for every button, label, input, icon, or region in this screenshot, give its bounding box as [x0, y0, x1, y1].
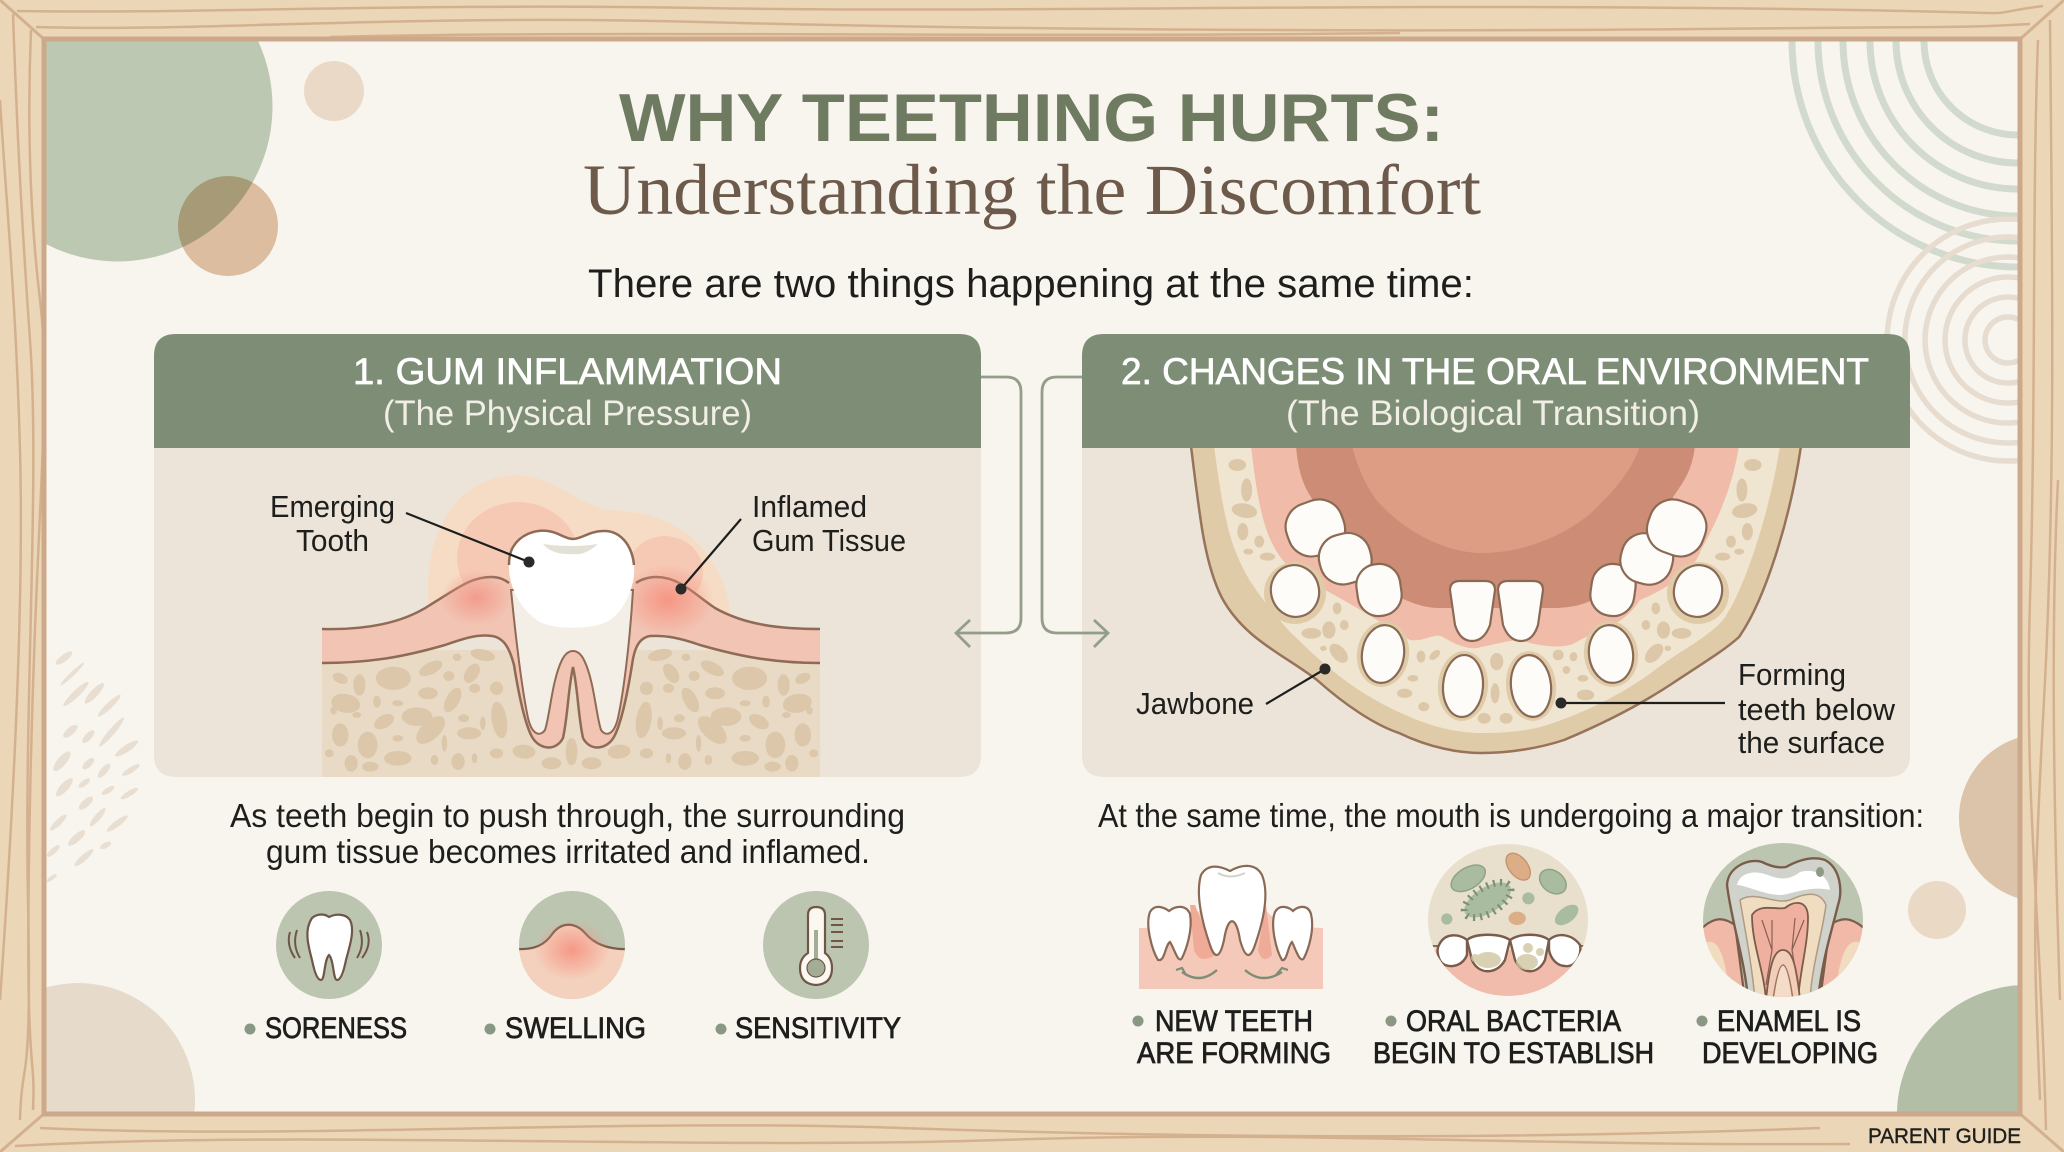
tooth crown: [509, 531, 634, 628]
label: inflamed gum tissue: Inflamed: [752, 489, 867, 524]
mouth floor: [1296, 446, 1695, 608]
title line 2: Understanding the Discomfort: [583, 150, 1481, 230]
inflammation glow: [428, 475, 729, 625]
teeth erupted: [1265, 493, 1728, 641]
label: new teeth: NEW TEETH: [1155, 1005, 1313, 1038]
icon: swelling: [519, 891, 625, 999]
panel background: [1082, 448, 1910, 777]
text block: gum description: gum tissue becomes irritated and inflamed.: [266, 833, 870, 870]
label: emerging tooth: Tooth: [296, 523, 369, 558]
illustration: emerging tooth in gum: [270, 475, 906, 777]
label: emerging tooth: [270, 489, 534, 568]
panel background: [154, 448, 981, 777]
icon: enamel developing: [1703, 843, 1863, 997]
icon: soreness: [276, 891, 382, 999]
bone: [322, 650, 820, 777]
gum: [322, 577, 820, 747]
label: soreness: SORENESS: [265, 1012, 407, 1045]
subtitle: There are two things happening at the same time:: [588, 262, 1474, 306]
footer label: parent guide: PARENT GUIDE: [1868, 1125, 2021, 1148]
bone spots: [1227, 459, 1762, 724]
text block: transition description: At the same time, the mouth is undergoing a major transition:: [1098, 797, 1924, 834]
label: forming teeth: Forming: [1738, 657, 1846, 692]
illustration: lower jaw: [1136, 446, 1896, 760]
tooth sockets: [1264, 562, 1729, 723]
label: new teeth: [1132, 1005, 1331, 1070]
tooth root: [511, 590, 633, 734]
panel header: [154, 334, 981, 448]
title: [583, 80, 1481, 230]
tongue: [1352, 446, 1640, 553]
label: oral bacteria: [1373, 1005, 1654, 1070]
label: oral bacteria: BEGIN TO ESTABLISH: [1373, 1037, 1654, 1070]
label: enamel: [1696, 1005, 1878, 1070]
panel header: 2. CHANGES IN THE ORAL ENVIRONMENT: [1121, 351, 1869, 392]
title line 1: WHY TEETHING HURTS:: [619, 80, 1444, 156]
jawbone: [1191, 446, 1801, 753]
label: oral bacteria: ORAL BACTERIA: [1406, 1005, 1621, 1038]
label: emerging tooth: Emerging: [270, 489, 395, 524]
panel: gum inflammation: [154, 334, 981, 777]
panel header: (The Biological Transition): [1286, 394, 1700, 433]
gum arch: [1251, 446, 1739, 648]
panel header: (The Physical Pressure): [383, 394, 752, 433]
icon: oral bacteria: [1428, 844, 1588, 996]
panel: oral environment: [1082, 334, 1910, 777]
label: enamel: DEVELOPING: [1702, 1037, 1878, 1070]
arrow: right connector: [1042, 377, 1108, 647]
label: forming teeth: the surface: [1738, 725, 1885, 760]
panel header: 1. GUM INFLAMMATION: [353, 351, 782, 392]
text block: gum description: As teeth begin to push through, the surrounding: [230, 797, 905, 834]
label: new teeth: ARE FORMING: [1137, 1037, 1331, 1070]
label: forming teeth: teeth below: [1738, 692, 1896, 727]
label: jawbone: [1136, 664, 1330, 721]
label: inflamed gum tissue: [676, 489, 906, 594]
text block: gum description: [230, 797, 905, 870]
label: enamel: ENAMEL IS: [1717, 1005, 1861, 1038]
icon: sensitivity thermometer: [763, 891, 869, 999]
label: sensitivity: SENSITIVITY: [735, 1012, 901, 1045]
icon: new teeth forming: [1139, 866, 1323, 989]
label: jawbone: Jawbone: [1136, 686, 1254, 721]
arrow: left connector: [956, 377, 1021, 647]
label: forming teeth: [1556, 657, 1896, 760]
teeth forming below the surface: [1358, 622, 1637, 719]
panel header: [1082, 334, 1910, 448]
label: swelling: SWELLING: [505, 1012, 646, 1045]
label: inflamed gum tissue: Gum Tissue: [752, 523, 906, 558]
